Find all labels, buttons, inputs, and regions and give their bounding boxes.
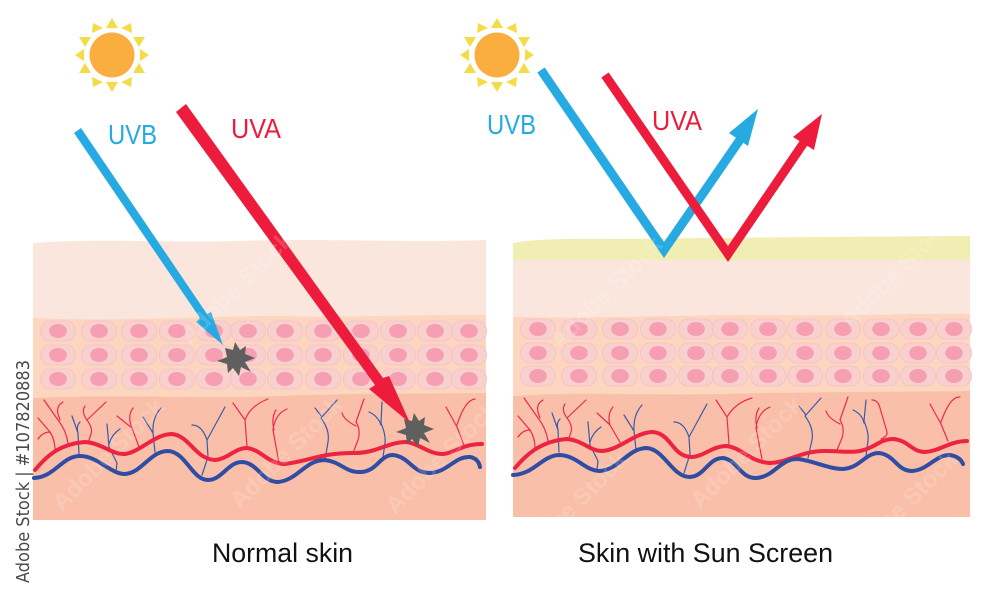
skin layer: cell layer bbox=[33, 315, 486, 400]
skin layer: epidermis surface bbox=[513, 260, 970, 322]
label: UVA: UVA bbox=[231, 113, 281, 144]
sunscreen layer bbox=[513, 236, 970, 262]
stock watermarks: Adobe Stock bbox=[685, 391, 808, 514]
small vessels: red capillaries bbox=[38, 399, 475, 463]
label: UVA: UVA bbox=[652, 105, 702, 136]
vein: blue vessel bbox=[513, 448, 963, 478]
skin layer: cell layer bbox=[513, 314, 970, 398]
vein: blue vessel bbox=[34, 451, 480, 482]
stock watermarks: Adobe Stock bbox=[47, 393, 170, 516]
arrow: UVB penetrating bbox=[74, 128, 223, 345]
label: UVB: UVB bbox=[108, 119, 157, 150]
arrow: UVA reflected bbox=[605, 75, 822, 254]
skin layer: dermis bbox=[513, 391, 970, 517]
stock watermarks: Adobe Stock bbox=[840, 446, 963, 569]
small vessels: blue capillaries bbox=[72, 400, 385, 475]
icon: damage burst from UVA bbox=[396, 413, 434, 447]
skin layer: dermis bbox=[33, 393, 486, 520]
icon: damage burst from UVB bbox=[217, 342, 255, 376]
icon: sun bbox=[75, 18, 149, 92]
epidermal cells bbox=[520, 319, 972, 386]
panel: skin with sun screen bbox=[460, 18, 972, 568]
caption: normal skin: Normal skin bbox=[212, 538, 353, 568]
stock watermarks: Adobe Stock bbox=[510, 446, 633, 569]
stock watermarks: Adobe Stock bbox=[380, 396, 503, 519]
artery: red vessel bbox=[515, 432, 967, 468]
small vessels: red capillaries bbox=[518, 397, 960, 459]
small vessels: blue capillaries bbox=[552, 398, 868, 473]
artery: red vessel bbox=[35, 434, 482, 470]
stock watermarks: Adobe Stock bbox=[175, 226, 298, 349]
stock image credit: Adobe Stock | #107820883 bbox=[13, 360, 34, 583]
skin layer: epidermis surface bbox=[33, 240, 486, 325]
epidermal cells bbox=[40, 321, 486, 389]
arrow: UVB reflected bbox=[541, 70, 758, 250]
arrow: UVA penetrating bbox=[176, 104, 410, 423]
stock watermarks: Adobe Stock bbox=[545, 231, 668, 354]
stock watermarks: Adobe Stock bbox=[225, 391, 348, 514]
caption: skin with sun screen: Skin with Sun Screen bbox=[578, 538, 833, 568]
stock watermarks: Adobe Stock bbox=[835, 211, 958, 334]
label: UVB: UVB bbox=[487, 109, 536, 140]
stock watermarks bbox=[47, 211, 963, 569]
icon: sun bbox=[460, 18, 534, 92]
panel: normal skin bbox=[33, 18, 486, 568]
